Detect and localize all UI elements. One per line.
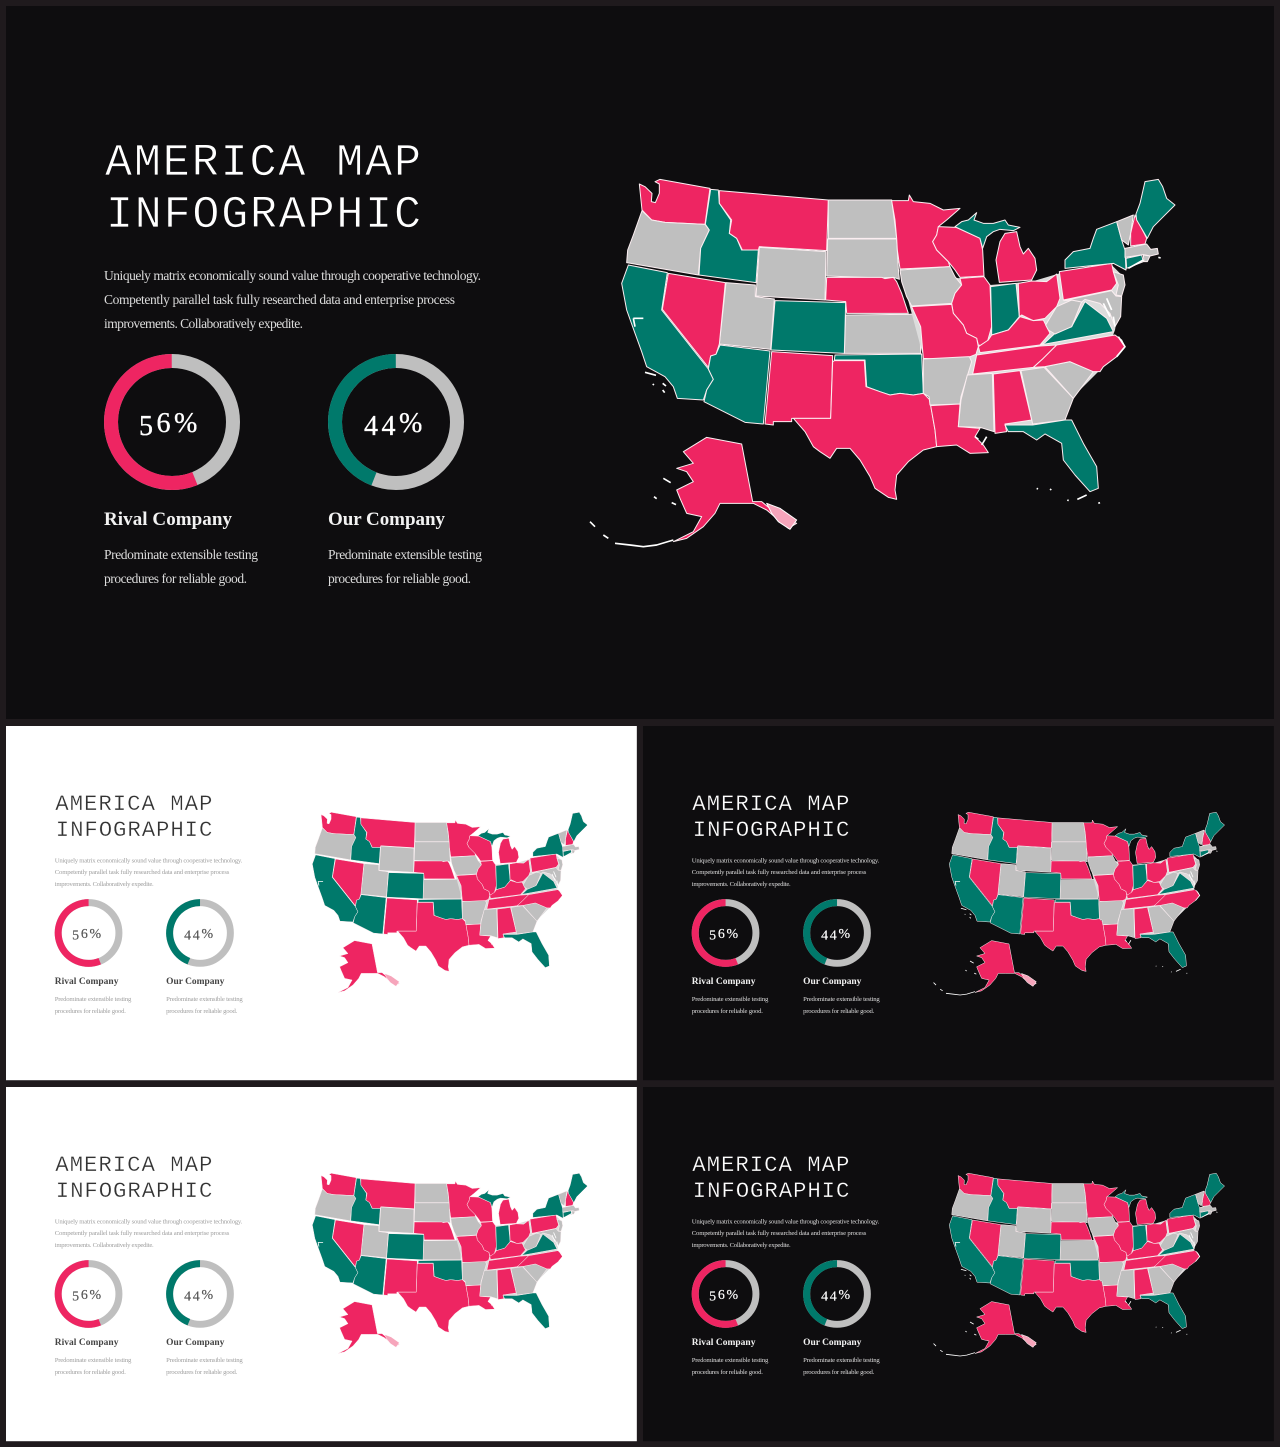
panel: white slide top left <box>6 726 637 1080</box>
donut chart: our company 44%: % <box>202 1288 215 1303</box>
donut chart: our company 44%: % <box>839 1288 852 1303</box>
donut chart: rival company 56% <box>686 894 765 972</box>
text block: intro: Uniquely matrix economically sound value through cooperative technology. <box>55 857 243 864</box>
text block: rival company: Predominate extensible testing <box>55 1357 132 1364</box>
title: INFOGRAPHIC <box>106 190 421 241</box>
text block: rival company: Predominate extensible testing <box>692 996 769 1003</box>
text block: our company: Our Company <box>328 509 446 530</box>
text block: intro <box>55 1218 243 1249</box>
title: INFOGRAPHIC <box>56 817 212 843</box>
donut chart: rival company 56%: 5 <box>709 1289 718 1304</box>
text block: rival company <box>692 977 769 1015</box>
donut chart: our company 44%: % <box>839 927 852 942</box>
map: United States <box>590 179 1175 547</box>
text block: rival company <box>55 1338 132 1376</box>
text block: our company <box>166 977 243 1015</box>
text block: our company <box>803 977 880 1015</box>
title <box>55 791 212 843</box>
title: INFOGRAPHIC <box>56 1178 212 1204</box>
text block: our company: Our Company <box>166 1338 225 1348</box>
text block: our company: Our Company <box>166 977 225 987</box>
text block: rival company: Predominate extensible testing <box>692 1357 769 1364</box>
panel: large dark slide <box>6 6 1274 719</box>
donut chart: rival company 56%: 6% <box>156 408 201 439</box>
title: AMERICA MAP <box>55 791 212 817</box>
title <box>105 138 421 241</box>
donut chart: our company 44% <box>798 1255 876 1333</box>
title: AMERICA MAP <box>692 1152 849 1178</box>
title: INFOGRAPHIC <box>693 817 849 843</box>
text block: intro: improvements. Collaboratively expedite. <box>692 881 791 888</box>
text block: intro: Competently parallel task fully researched data and enterprise process <box>55 869 230 876</box>
text block: rival company: procedures for reliable good. <box>692 1369 763 1376</box>
text block: rival company: Rival Company <box>55 1338 119 1348</box>
map: United States <box>297 812 588 995</box>
panel: dark slide bottom right <box>643 1087 1274 1441</box>
text block: our company: Predominate extensible testing <box>166 1357 243 1364</box>
donut chart: rival company 56%: 6% <box>81 927 103 942</box>
donut chart: rival company 56% <box>49 894 128 972</box>
donut chart: our company 44%: 44 <box>184 928 202 943</box>
panel: dark slide top right <box>643 726 1274 1080</box>
text block: intro: Competently parallel task fully researched data and enterprise process <box>55 1230 230 1237</box>
text block: intro: Competently parallel task fully researched data and enterprise process <box>692 869 867 876</box>
donut chart: our company 44%: 44 <box>821 1289 839 1304</box>
text block: rival company: procedures for reliable good. <box>692 1008 763 1015</box>
map: United States <box>934 1173 1225 1356</box>
text block: our company: procedures for reliable good. <box>803 1008 875 1015</box>
title: AMERICA MAP <box>692 791 849 817</box>
text block: intro <box>55 857 243 888</box>
text block: rival company: procedures for reliable good. <box>55 1369 126 1376</box>
text block: our company <box>328 509 482 586</box>
text block: rival company: Rival Company <box>55 977 119 987</box>
map: United States <box>297 1173 588 1356</box>
donut chart: our company 44%: 44 <box>364 411 399 442</box>
donut chart: rival company 56% <box>49 1255 128 1333</box>
text block: intro: Competently parallel task fully researched data and enterprise process <box>104 292 455 307</box>
text block: rival company <box>692 1338 769 1376</box>
text block: intro: improvements. Collaboratively expedite. <box>104 316 303 331</box>
text block: intro: improvements. Collaboratively expedite. <box>692 1242 791 1249</box>
donut chart: rival company 56%: 6% <box>81 1288 103 1303</box>
donut chart: our company 44% <box>798 894 876 972</box>
donut chart: our company 44% <box>161 894 239 972</box>
text block: rival company: Rival Company <box>692 1338 756 1348</box>
donut chart: rival company 56%: 5 <box>72 1289 81 1304</box>
text block: rival company: Predominate extensible testing <box>104 547 258 562</box>
text block: intro: Uniquely matrix economically sound value through cooperative technology. <box>55 1218 243 1225</box>
text block: our company: procedures for reliable good. <box>166 1369 238 1376</box>
title: INFOGRAPHIC <box>693 1178 849 1204</box>
donut chart: rival company 56%: 5 <box>709 928 718 943</box>
text block: our company: procedures for reliable good. <box>328 571 471 586</box>
donut chart: our company 44%: % <box>202 927 215 942</box>
text block: intro <box>692 857 880 888</box>
panel: white slide bottom left <box>6 1087 637 1441</box>
text block: rival company: Rival Company <box>104 509 232 530</box>
text block: our company: Predominate extensible testing <box>328 547 482 562</box>
text block: intro <box>692 1218 880 1249</box>
text block: rival company: Rival Company <box>692 977 756 987</box>
text block: intro: Uniquely matrix economically sound value through cooperative technology. <box>692 857 880 864</box>
title: AMERICA MAP <box>105 138 421 189</box>
donut chart: our company 44% <box>161 1255 239 1333</box>
title: AMERICA MAP <box>55 1152 212 1178</box>
text block: rival company: Predominate extensible testing <box>55 996 132 1003</box>
text block: rival company: procedures for reliable good. <box>55 1008 126 1015</box>
donut chart: rival company 56% <box>686 1255 765 1333</box>
text block: our company <box>803 1338 880 1376</box>
text block: our company: Predominate extensible testing <box>803 1357 880 1364</box>
text block: our company: Predominate extensible testing <box>166 996 243 1003</box>
text block: our company: procedures for reliable good. <box>803 1369 875 1376</box>
donut chart: rival company 56%: 5 <box>139 411 156 442</box>
text block: intro: improvements. Collaboratively expedite. <box>55 1242 154 1249</box>
text block: our company: Predominate extensible testing <box>803 996 880 1003</box>
title <box>692 1152 849 1204</box>
donut chart: our company 44%: % <box>399 408 426 439</box>
donut chart: rival company 56%: 5 <box>72 928 81 943</box>
donut chart: our company 44% <box>317 343 475 501</box>
text block: our company: Our Company <box>803 1338 862 1348</box>
map: United States <box>934 812 1225 995</box>
donut chart: our company 44%: 44 <box>821 928 839 943</box>
title <box>55 1152 212 1204</box>
title <box>692 791 849 843</box>
text block: intro: improvements. Collaboratively expedite. <box>55 881 154 888</box>
text block: our company: procedures for reliable good. <box>166 1008 238 1015</box>
text block: rival company: procedures for reliable good. <box>104 571 247 586</box>
donut chart: rival company 56%: 6% <box>718 1288 740 1303</box>
donut chart: rival company 56% <box>93 343 251 501</box>
donut chart: our company 44%: 44 <box>184 1289 202 1304</box>
donut chart: rival company 56%: 6% <box>718 927 740 942</box>
text block: intro: Competently parallel task fully researched data and enterprise process <box>692 1230 867 1237</box>
text block: intro <box>104 268 481 331</box>
text block: rival company <box>55 977 132 1015</box>
text block: rival company <box>104 509 258 586</box>
text block: our company <box>166 1338 243 1376</box>
text block: intro: Uniquely matrix economically sound value through cooperative technology. <box>692 1218 880 1225</box>
text block: our company: Our Company <box>803 977 862 987</box>
text block: intro: Uniquely matrix economically sound value through cooperative technology. <box>104 268 481 283</box>
